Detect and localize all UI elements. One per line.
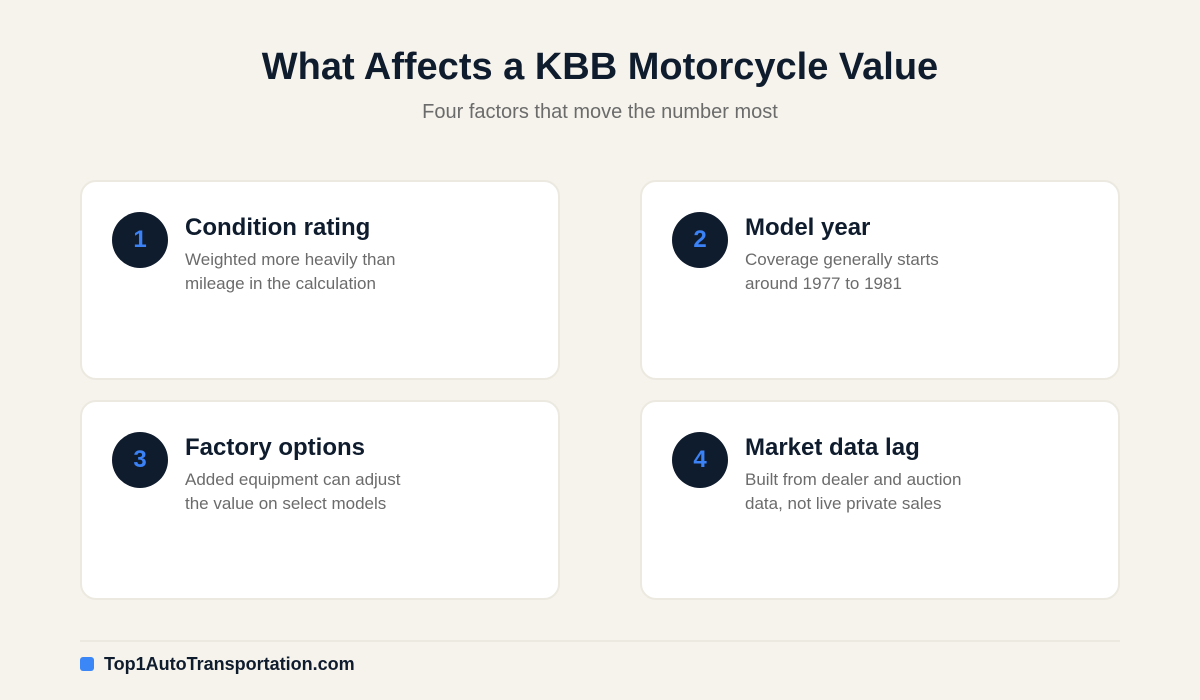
subtitle: Four factors that move the number most xyxy=(422,101,778,123)
text: factory options description xyxy=(185,470,400,513)
icon: blue square xyxy=(80,657,94,671)
number badge 2 xyxy=(672,212,728,268)
text: condition rating description: mileage in the calculation xyxy=(185,274,376,293)
text: model year description: Coverage generally starts xyxy=(745,250,939,269)
text: market data lag description: Built from dealer and auction xyxy=(745,470,961,489)
text: model year description xyxy=(745,250,939,293)
number badge 1 xyxy=(112,212,168,268)
number badge 4: 4 xyxy=(693,446,707,473)
heading: market data lag: Market data lag xyxy=(745,434,920,461)
number badge 2: 2 xyxy=(693,226,707,253)
text: model year description: around 1977 to 1981 xyxy=(745,274,902,293)
panel: market data lag xyxy=(640,400,1120,600)
number badge 1: 1 xyxy=(133,226,147,253)
number badge 3: 3 xyxy=(133,446,147,473)
panel: model year xyxy=(640,180,1120,380)
text: factory options description: the value on select models xyxy=(185,494,386,513)
brand text: Top1AutoTransportation.com xyxy=(104,654,355,674)
panel: factory options xyxy=(80,400,560,600)
number badge 3 xyxy=(112,432,168,488)
text: market data lag description: data, not live private sales xyxy=(745,494,942,513)
heading: condition rating: Condition rating xyxy=(185,214,370,241)
footer brand xyxy=(80,654,355,674)
text: market data lag description xyxy=(745,470,961,513)
heading: model year: Model year xyxy=(745,214,870,241)
panel: condition rating xyxy=(80,180,560,380)
heading: factory options: Factory options xyxy=(185,434,365,461)
number badge 4 xyxy=(672,432,728,488)
text: condition rating description xyxy=(185,250,395,293)
title: What Affects a KBB Motorcycle Value xyxy=(262,46,938,88)
text: factory options description: Added equipment can adjust xyxy=(185,470,400,489)
text: condition rating description: Weighted more heavily than xyxy=(185,250,395,269)
